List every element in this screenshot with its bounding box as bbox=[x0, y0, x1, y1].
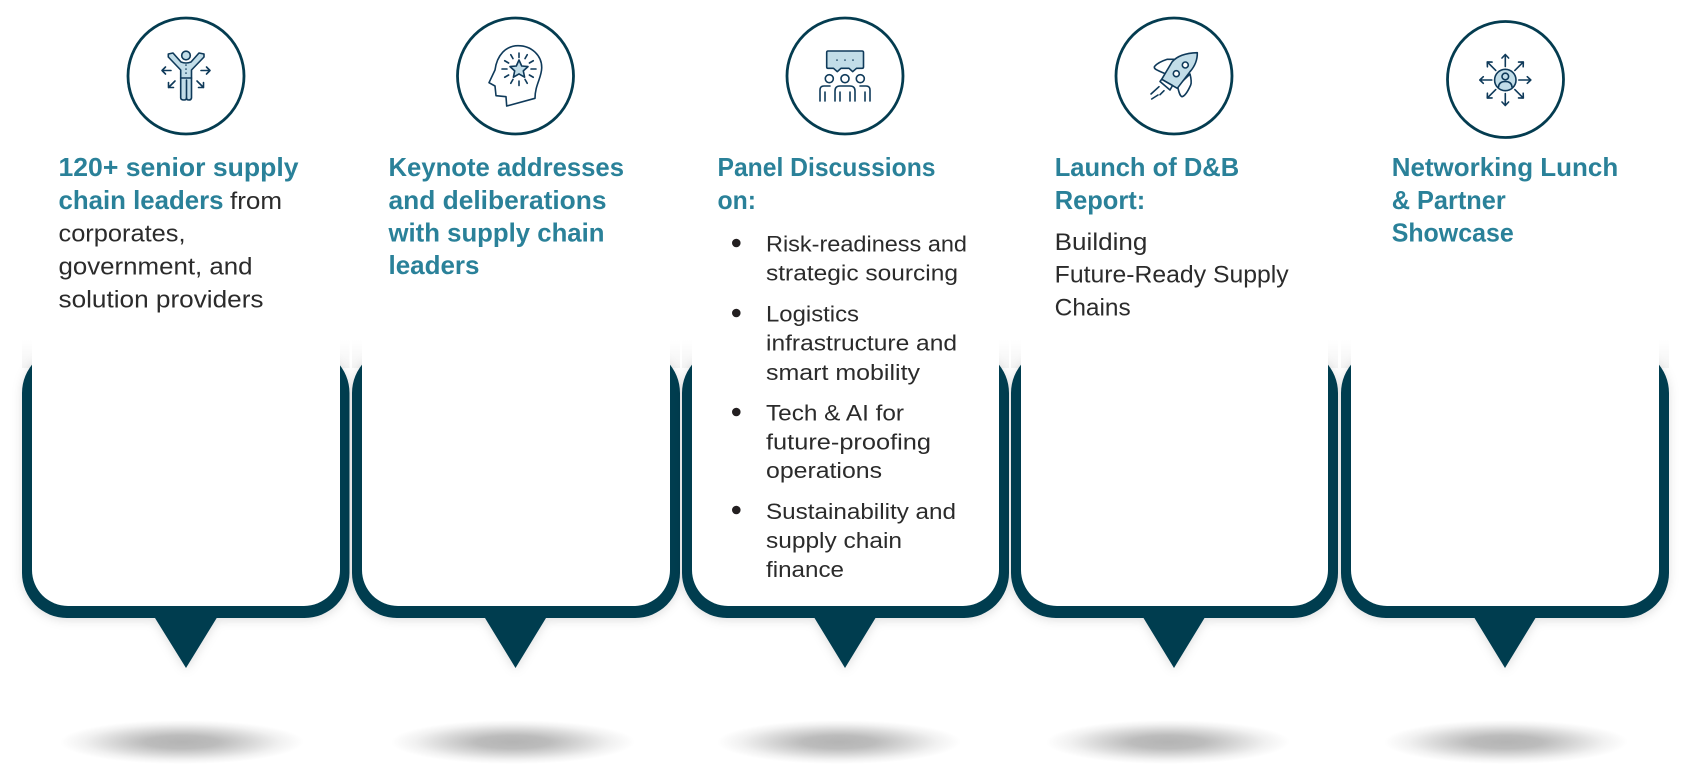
icon: rocket bbox=[1116, 18, 1232, 134]
panel: networking lunch bbox=[1341, 22, 1669, 764]
heading: Keynote addresses bbox=[388, 152, 624, 182]
panel: panel discussions bbox=[682, 18, 1009, 764]
heading: Panel Discussions bbox=[718, 152, 936, 182]
bullet list of topics: Risk-readiness and bbox=[766, 232, 967, 257]
bullet list of topics: finance bbox=[766, 557, 844, 582]
floor shadow bbox=[717, 720, 961, 764]
icon: person with radiating arrows bbox=[1448, 22, 1564, 138]
heading and description: chain leaders bbox=[58, 185, 224, 215]
bullet list of topics: Sustainability and bbox=[766, 499, 956, 524]
heading and description: Future-Ready Supply bbox=[1055, 262, 1289, 289]
bullet list of topics: supply chain bbox=[766, 528, 902, 553]
bullet list of topics bbox=[732, 232, 967, 582]
floor shadow bbox=[60, 720, 304, 764]
heading and description: Chains bbox=[1055, 295, 1131, 322]
floor shadow bbox=[1384, 720, 1628, 764]
heading: with supply chain bbox=[388, 218, 604, 248]
heading bbox=[1392, 152, 1618, 248]
heading and description: corporates, bbox=[58, 220, 186, 248]
heading: Showcase bbox=[1392, 218, 1514, 248]
heading and description: government, and bbox=[58, 254, 252, 280]
panel: launch of report bbox=[1011, 18, 1338, 764]
callout card with pointer bbox=[682, 330, 1009, 668]
heading bbox=[718, 152, 936, 215]
heading: leaders bbox=[388, 250, 480, 280]
callout card with pointer bbox=[352, 330, 680, 668]
heading and description: solution providers bbox=[58, 286, 264, 314]
bullet list of topics: operations bbox=[766, 458, 882, 483]
heading and description: Building bbox=[1055, 229, 1147, 256]
icon: speech bubble above three people bbox=[787, 18, 903, 134]
heading: and deliberations bbox=[388, 185, 606, 215]
panel: keynote addresses bbox=[352, 18, 680, 764]
heading: & Partner bbox=[1392, 185, 1506, 215]
heading and description: Report: bbox=[1055, 185, 1145, 215]
heading and description: from bbox=[230, 188, 282, 215]
heading bbox=[388, 152, 624, 280]
panel: senior supply chain leaders bbox=[22, 18, 350, 764]
callout card with pointer bbox=[22, 330, 350, 668]
heading and description bbox=[58, 152, 299, 314]
floor shadow bbox=[391, 720, 635, 764]
heading and description: Launch of D&B bbox=[1055, 152, 1239, 182]
bullet list of topics: Logistics bbox=[766, 302, 859, 327]
callout card with pointer bbox=[1011, 330, 1338, 668]
floor shadow bbox=[1046, 720, 1290, 764]
heading: on: bbox=[718, 185, 756, 215]
callout card with pointer bbox=[1341, 330, 1669, 668]
heading: Networking Lunch bbox=[1392, 152, 1618, 182]
heading and description bbox=[1055, 152, 1289, 322]
bullet list of topics: infrastructure and bbox=[766, 331, 957, 356]
heading and description: 120+ senior supply bbox=[58, 152, 299, 182]
bullet list of topics: future-proofing bbox=[766, 429, 931, 454]
bullet list of topics: Tech & AI for bbox=[766, 401, 905, 426]
bullet list of topics: strategic sourcing bbox=[766, 261, 958, 286]
bullet list of topics: smart mobility bbox=[766, 360, 921, 385]
icon: person with outward arrows bbox=[128, 18, 244, 134]
icon: head with star bbox=[458, 18, 574, 134]
